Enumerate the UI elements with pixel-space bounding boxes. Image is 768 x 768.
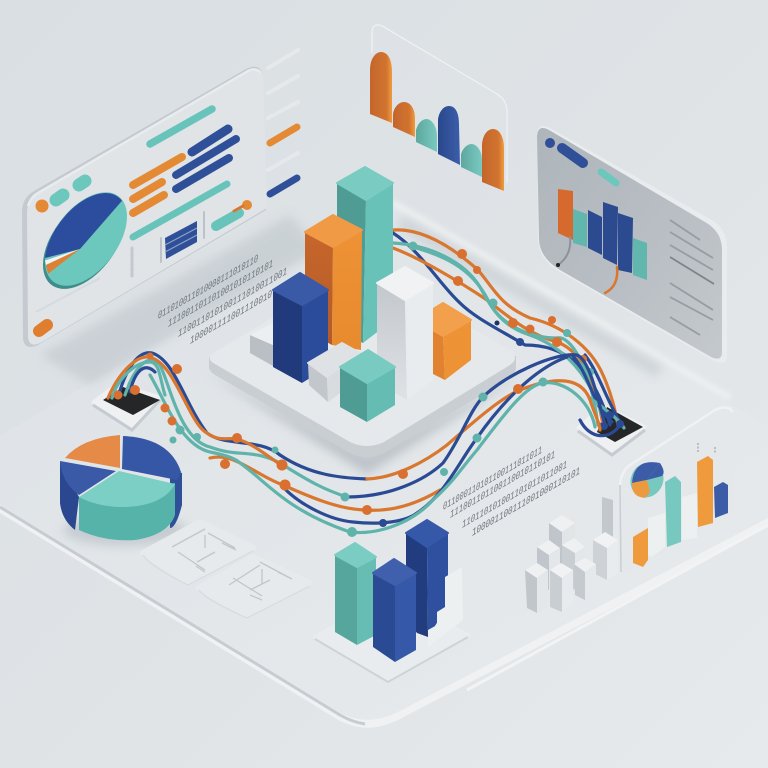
central bar: tall teal — [337, 167, 393, 343]
panel bar chart — [558, 189, 647, 280]
block low right — [574, 558, 596, 600]
slice navy right — [122, 436, 181, 480]
block tall thin — [602, 497, 619, 540]
binary text block right — [443, 445, 580, 540]
mini card 1 — [143, 522, 253, 585]
panel: floating arch chart — [370, 25, 507, 191]
panel: small right chart — [620, 407, 733, 575]
status chips — [36, 181, 100, 331]
slice orange — [65, 435, 120, 468]
lower teal bar — [335, 543, 376, 645]
lower white steps — [428, 567, 463, 647]
lower navy bar — [406, 520, 448, 637]
binary text block left: 100001111001110010 — [190, 289, 272, 348]
wire anchor left — [93, 384, 160, 430]
pie chart 3D — [60, 435, 182, 540]
binary text block left: 110011010100111010011001 — [178, 266, 287, 341]
pie shadow — [63, 514, 187, 546]
central cube: teal — [340, 350, 395, 422]
central bar: navy — [273, 273, 328, 383]
binary text block right: 100001100111001000110101 — [472, 466, 580, 540]
pie chart on panel — [43, 175, 127, 306]
wire nodes upper — [408, 242, 624, 430]
central bar: small orange — [415, 303, 471, 380]
binary text block right: 011000110101100111011011 — [443, 445, 542, 514]
binary text block left: 111001101101001010110101 — [168, 259, 273, 331]
block mid left — [537, 540, 560, 590]
block top — [549, 515, 575, 570]
binary text block right: 111001101100110010110101 — [450, 450, 555, 522]
block low middle — [550, 563, 573, 612]
lower base — [315, 594, 468, 680]
arch bar 2 — [393, 102, 415, 137]
block mid right — [562, 538, 585, 590]
arch bar 1 — [370, 52, 392, 123]
lower blue bar — [373, 559, 416, 662]
central bar: orange — [305, 215, 362, 350]
side legend bars — [268, 50, 298, 194]
wire nodes main — [114, 352, 548, 537]
panel connector wires — [556, 237, 617, 293]
flow wires main — [108, 352, 605, 537]
binary text block right: 110110101001101011011001 — [462, 460, 567, 532]
white block staircase — [525, 497, 619, 613]
central base shadow — [205, 370, 530, 475]
mini pie — [624, 456, 670, 504]
binary text block left — [158, 254, 287, 348]
mini card 2 — [199, 557, 310, 618]
navy block — [165, 221, 197, 259]
arch bar 6 — [482, 129, 504, 191]
lower bar group — [315, 520, 468, 682]
arch bar 3 — [416, 119, 437, 152]
panel text lines — [670, 220, 714, 335]
block right — [593, 532, 618, 580]
slice teal — [79, 471, 175, 540]
central cube: small gray — [250, 323, 273, 366]
arch bar 4 — [438, 106, 460, 165]
mini bars — [633, 456, 728, 567]
slice navy left — [60, 461, 116, 530]
panel: right dashboard — [537, 126, 727, 363]
text bars on panel — [132, 109, 252, 278]
central cube: gray — [308, 343, 360, 402]
platform floor — [0, 203, 768, 728]
flow wires upper right — [393, 230, 624, 436]
central platform — [209, 271, 516, 457]
wire anchor right — [578, 405, 645, 455]
central bar: tall white — [377, 267, 433, 400]
panel header pills — [545, 138, 616, 183]
arch bar 5 — [461, 144, 482, 177]
binary text block left: 011010011010000111010110 — [158, 254, 258, 323]
panel: left dashboard — [22, 67, 320, 385]
block low left — [525, 563, 548, 613]
